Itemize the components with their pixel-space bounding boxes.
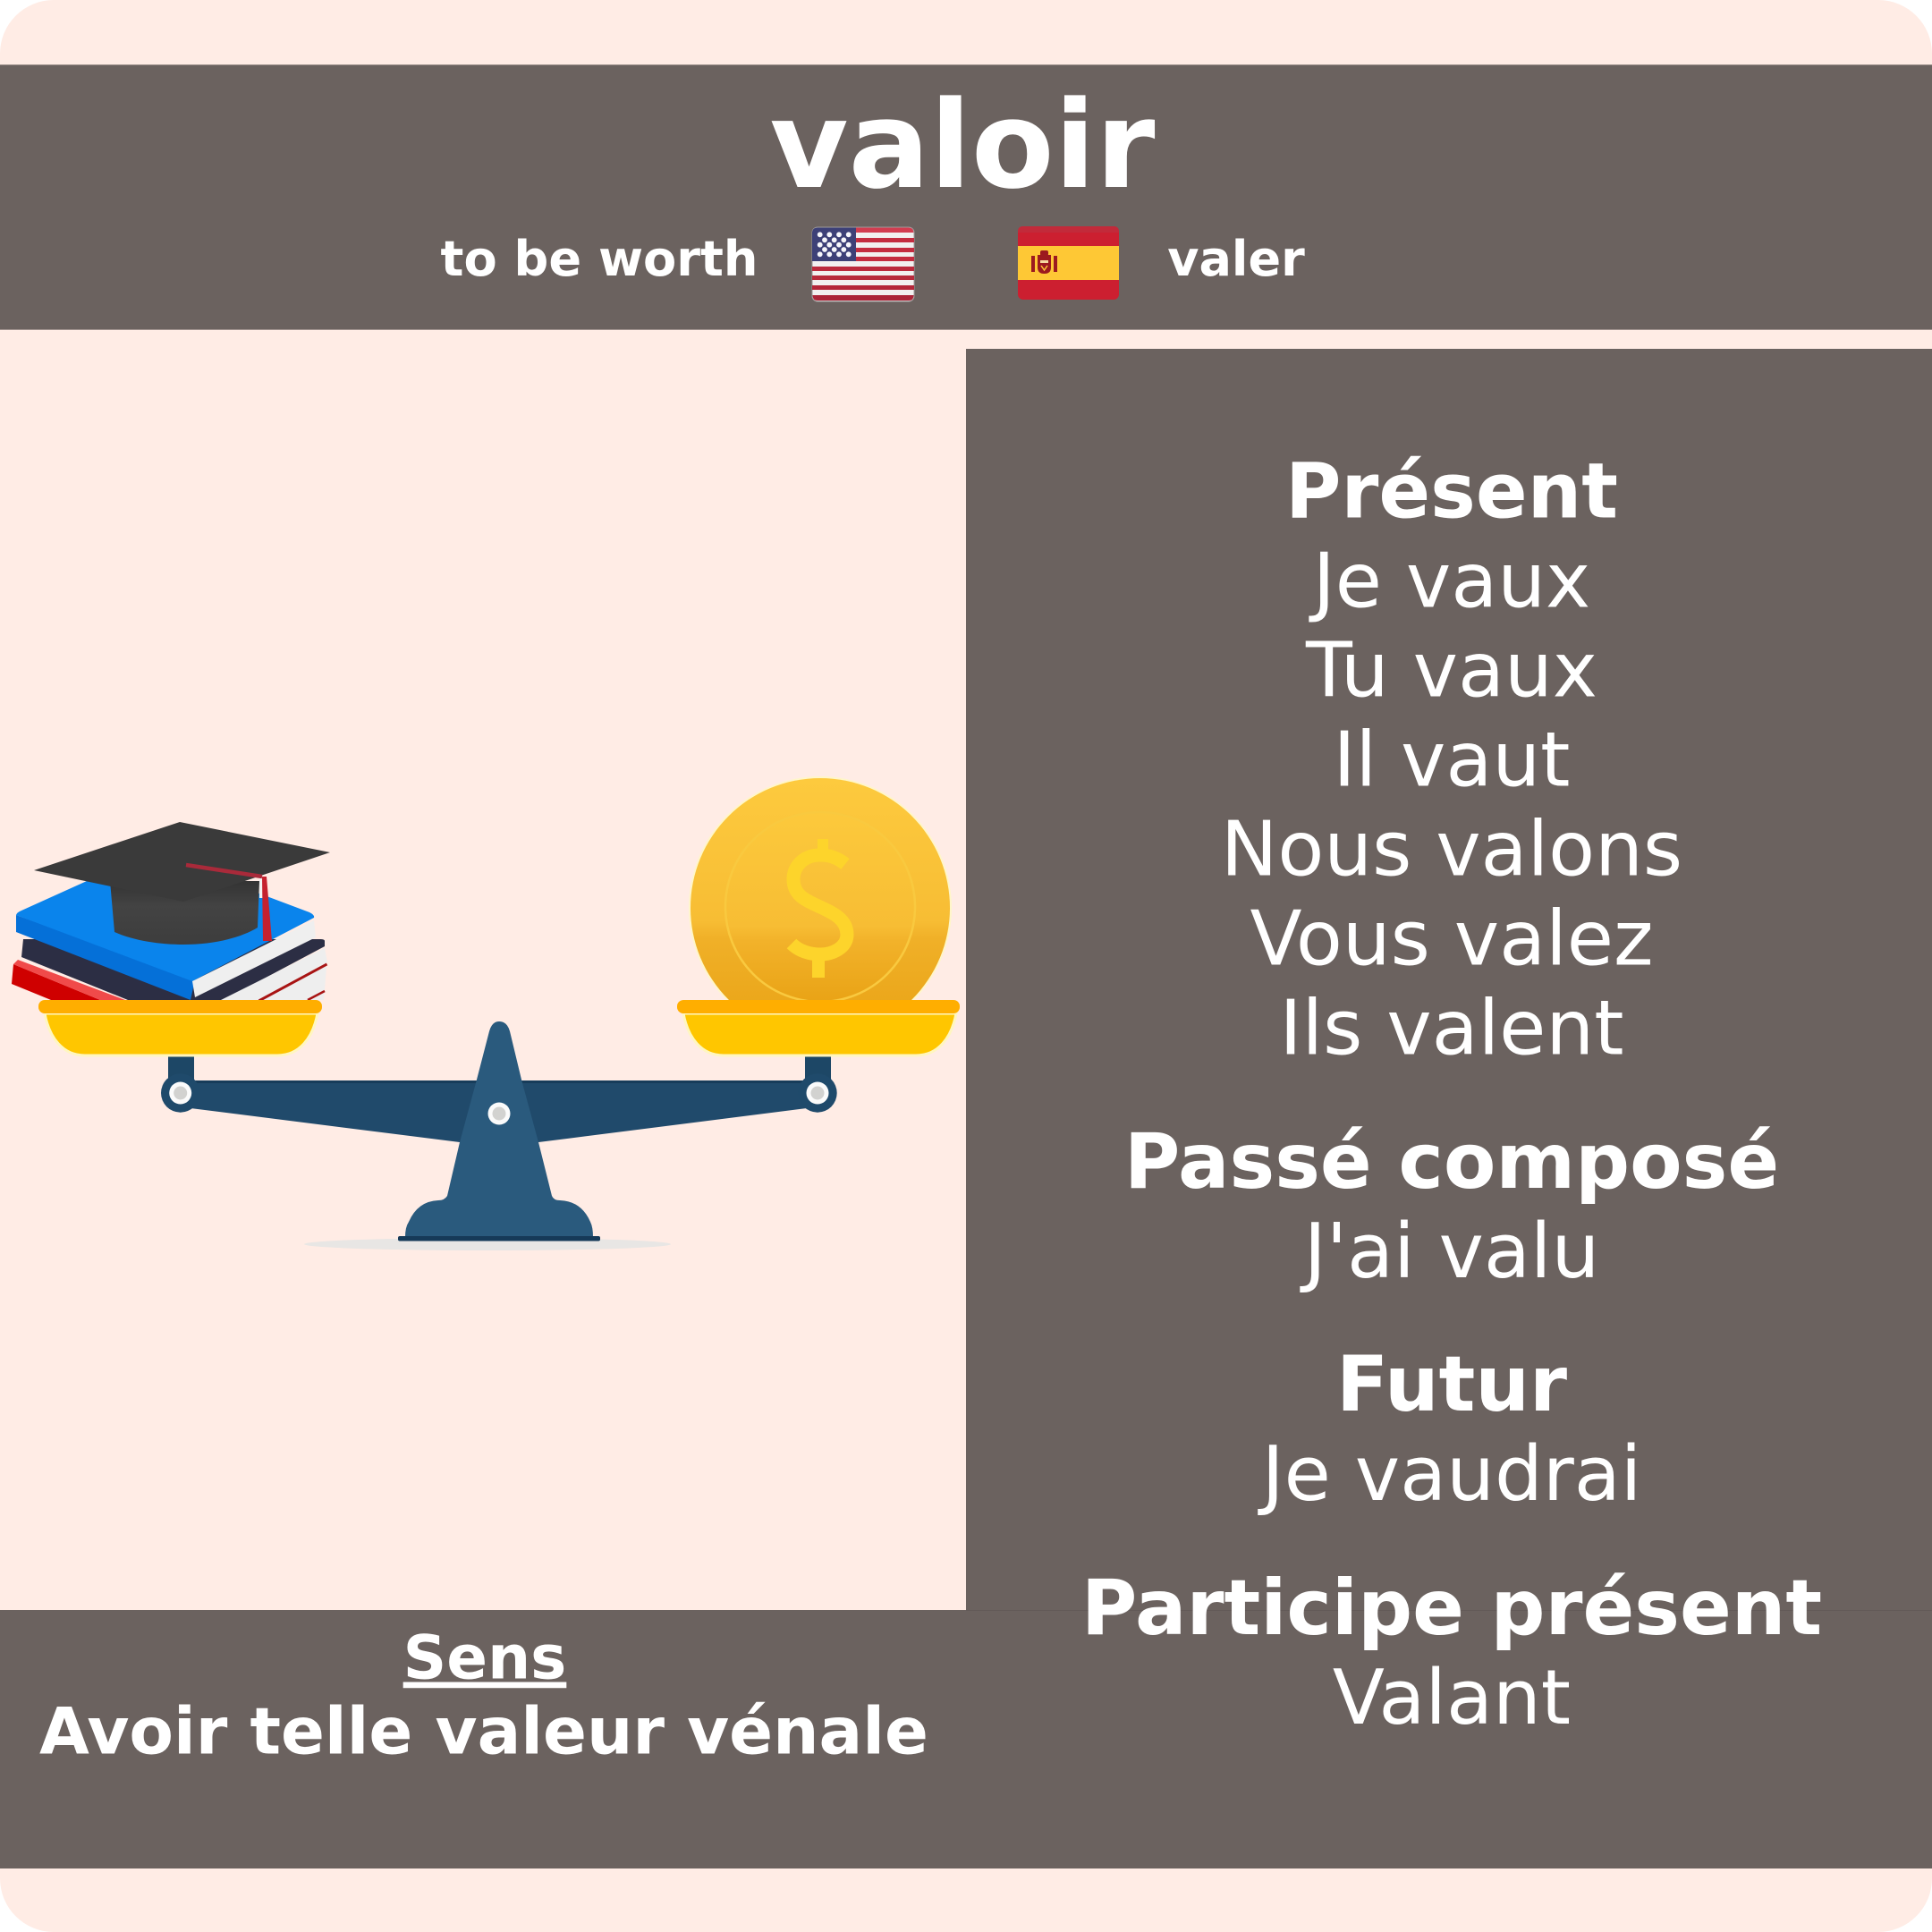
present participle form: Valant (1333, 1654, 1571, 1742)
meaning text: Avoir telle valeur vénale (39, 1694, 928, 1769)
icon: US flag (812, 227, 914, 301)
panel: meaning (0, 1610, 966, 1868)
icon: ground shadow (304, 1238, 671, 1250)
meaning heading: Sens (403, 1623, 566, 1692)
present tense forms: Tu vaux (1305, 626, 1597, 716)
icon: right pan (677, 1000, 960, 1055)
future form: Je vaudrai (1258, 1430, 1641, 1519)
icon: graduation cap (34, 822, 330, 945)
icon: dollar sign (792, 839, 847, 978)
icon: gold coin (689, 776, 952, 1039)
passé composé heading: Passé composé (1124, 1118, 1779, 1207)
header band (0, 64, 1932, 330)
passé composé form: J'ai valu (1300, 1208, 1599, 1296)
title: valoir (770, 75, 1156, 216)
Spanish translation: valer (1167, 231, 1305, 287)
future heading: Futur (1336, 1341, 1567, 1429)
present participle heading: Participe présent (1081, 1564, 1822, 1653)
icon: Spain flag (1018, 226, 1119, 300)
panel: conjugation (966, 349, 1932, 1868)
present tense forms (1221, 537, 1682, 1073)
icon: left pan (38, 1000, 322, 1055)
present tense heading: Présent (1285, 447, 1618, 537)
present tense forms: Je vaux (1309, 537, 1590, 626)
present tense forms: Nous valons (1221, 805, 1682, 894)
icon: book stack (12, 822, 330, 1000)
present tense forms: Il vaut (1334, 716, 1570, 805)
present tense forms: Vous valez (1250, 894, 1654, 984)
English translation: to be worth (441, 231, 758, 287)
present tense forms: Ils valent (1279, 984, 1624, 1073)
icon: beam (161, 1054, 837, 1142)
icon: stand (398, 1021, 600, 1241)
illustration: balance scale with books and coin (12, 776, 960, 1250)
